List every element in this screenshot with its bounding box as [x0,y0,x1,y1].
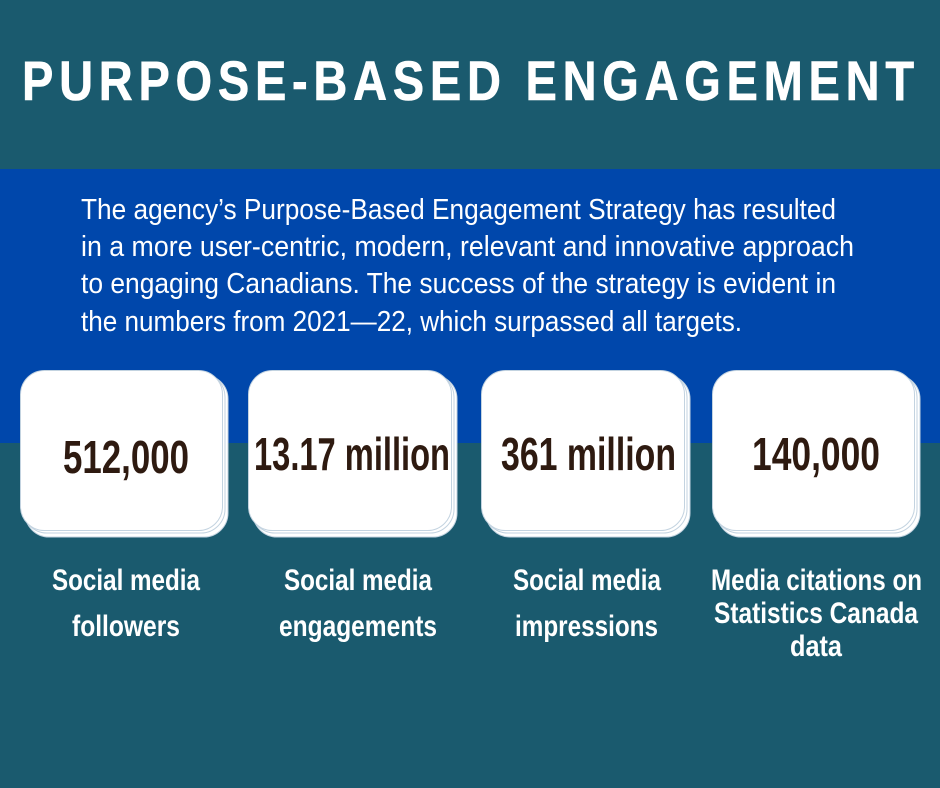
label: social media impressions: Social media [513,564,661,597]
intro text block: in a more user-centric, modern, relevant and innovative approach [81,231,854,263]
blue band [0,169,940,443]
label: social media engagements: engagements [279,610,437,643]
panel: social media followers [20,370,228,643]
label: social media impressions [513,564,661,643]
label: social media followers [52,564,200,643]
card: citations [712,370,920,537]
label: social media impressions: impressions [515,610,658,643]
panel: media citations [711,370,922,663]
card: engagements [248,370,457,537]
label: social media engagements [279,564,437,643]
number: 140,000: 140,000 [752,428,880,480]
label: social media followers: Social media [52,564,200,597]
label: social media followers: followers [72,610,180,643]
label: media citations on Statistics Canada data [711,564,922,663]
number: 512,000: 512,000 [63,431,189,483]
panel: social media impressions [482,370,690,643]
card: impressions [482,370,690,537]
label: media citations on Statistics Canada data: data [790,630,842,663]
title: PURPOSE-BASED ENGAGEMENT [22,49,914,112]
number: 13.17 million: 13.17 million [254,428,450,480]
intro text block [81,194,854,338]
panel: social media engagements [248,370,457,643]
intro text block: The agency’s Purpose-Based Engagement Strategy has resulted [81,194,836,226]
card: followers [20,370,228,537]
intro text block: the numbers from 2021—22, which surpassed all targets. [81,306,742,338]
intro text block: to engaging Canadians. The success of the strategy is evident in [81,268,836,300]
label: social media engagements: Social media [284,564,432,597]
number: 361 million: 361 million [501,428,676,480]
